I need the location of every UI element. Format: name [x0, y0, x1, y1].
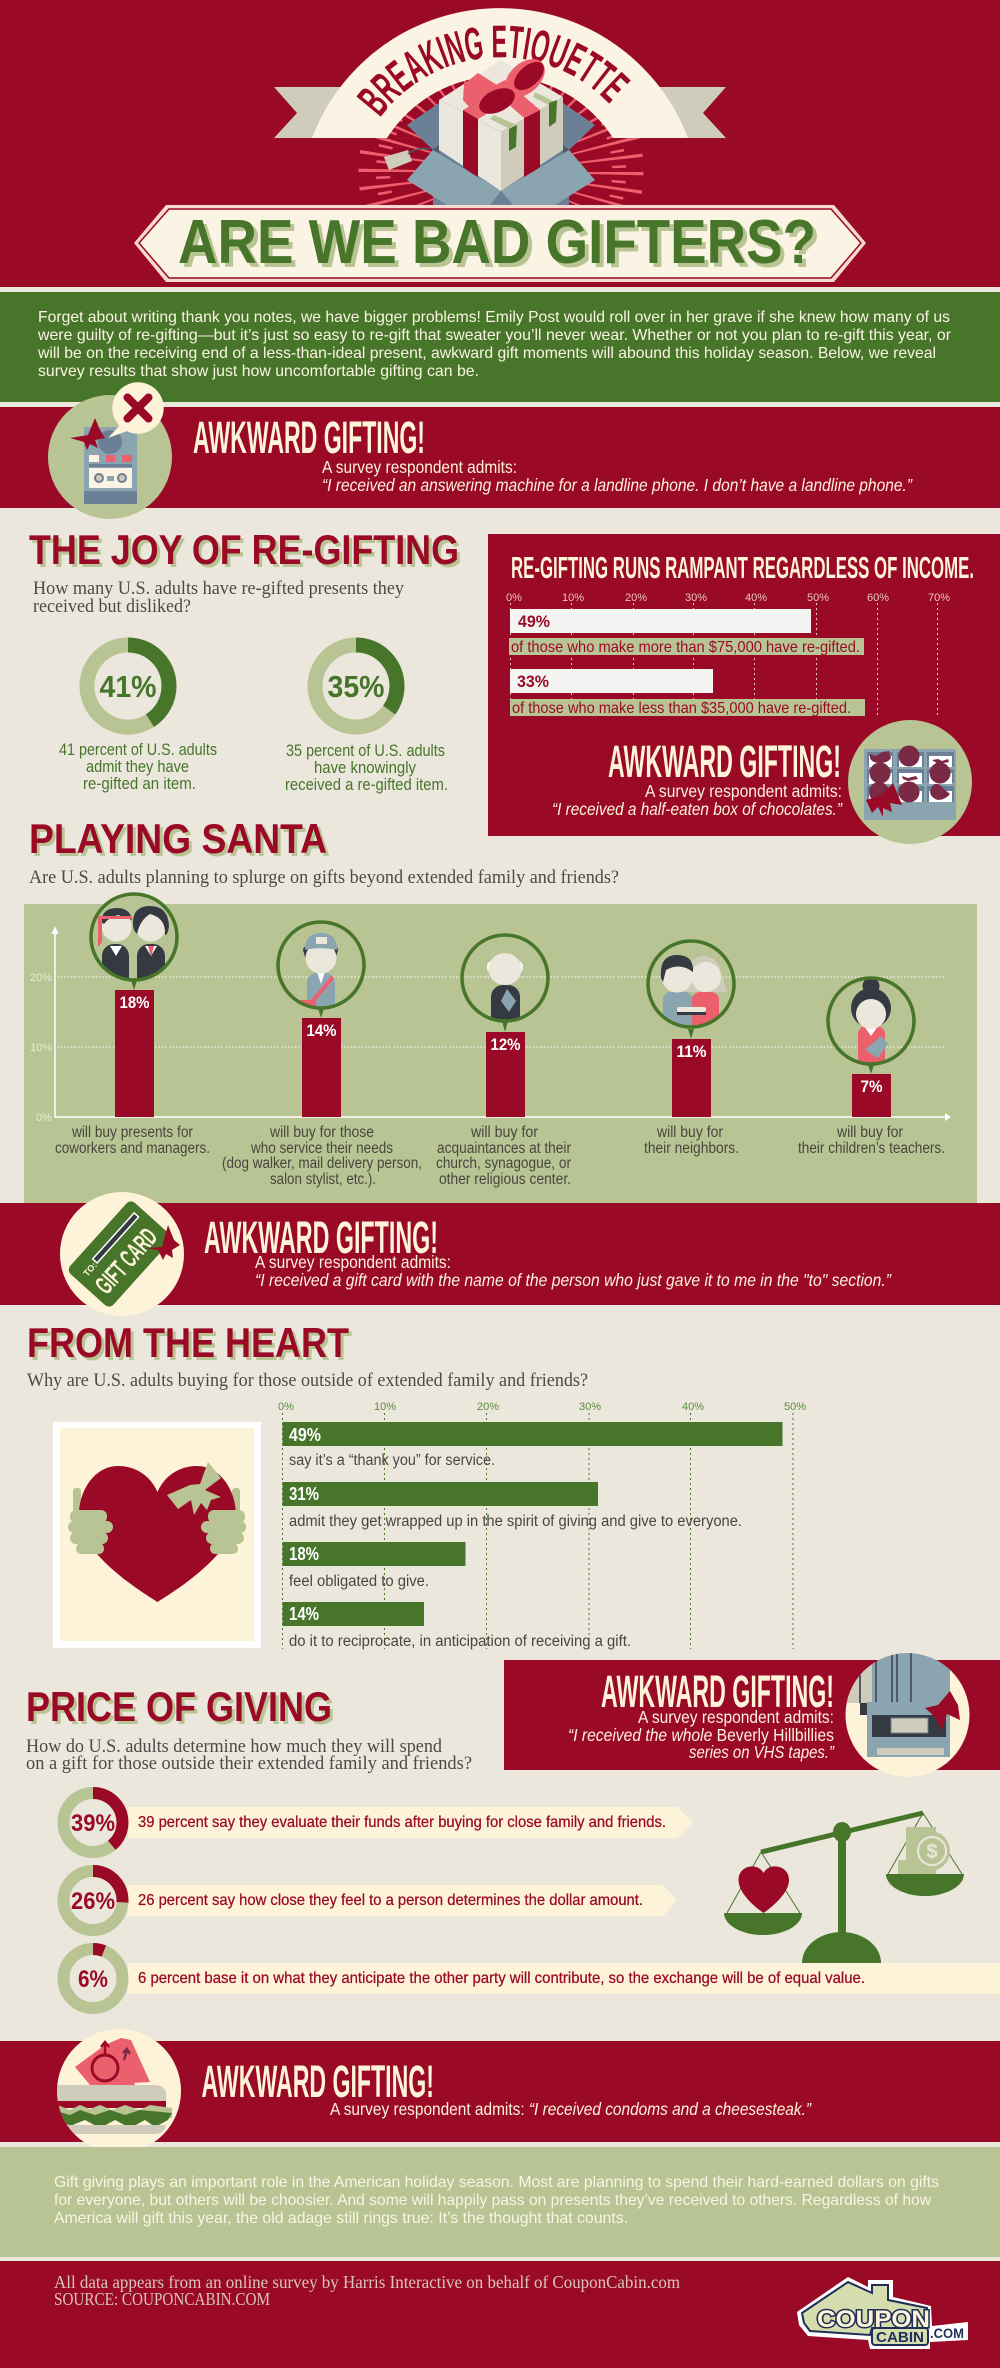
icon: condoms and cheesesteak	[50, 2029, 181, 2153]
section heading: price of giving: PRICE OF GIVING	[29, 1686, 335, 1733]
bar: coworkers 18 percent: 18%	[120, 993, 150, 1012]
icon: mail carrier	[278, 922, 364, 1023]
axis: 10%	[374, 1401, 396, 1413]
question: Are U.S. adults planning to splurge on gifts beyond extended family and friends?	[29, 867, 619, 888]
question	[26, 1736, 472, 1774]
row: 6 percent	[64, 1949, 1000, 2008]
arch with subtitle	[312, 8, 688, 138]
row: 26 percent: 26%	[71, 1888, 115, 1915]
caption: 35 percent: received a re-gifted item.	[285, 776, 448, 794]
source note: All data appears from an online survey by Harris Interactive on behalf of CouponCabin.com	[54, 2272, 680, 2292]
bar: 33 percent: 33%	[517, 672, 549, 691]
label: neighbors	[644, 1124, 739, 1157]
label: coworkers: will buy presents for	[71, 1124, 193, 1141]
donut: 41 percent: 41%	[100, 669, 156, 704]
panel: income	[488, 534, 1000, 844]
section heading: playing santa: PLAYING SANTA	[29, 815, 327, 862]
label: teachers: their children’s teachers.	[798, 1140, 945, 1157]
respondent quote	[255, 1252, 892, 1290]
section heading: from the heart: FROM THE HEART	[30, 1322, 352, 1369]
bar: 33 percent: of those who make less than $35,000 have re-gifted.	[512, 700, 851, 717]
bar: service workers 14 percent: 14%	[306, 1021, 336, 1040]
logo: CouponCabin: .COM	[930, 2325, 964, 2341]
heading: AWKWARD GIFTING!	[204, 1212, 438, 1263]
respondent quote	[552, 781, 843, 819]
caption: 41 percent: 41 percent of U.S. adults	[59, 741, 217, 759]
income axis: 50%	[807, 592, 829, 604]
respondent quote: “I received an answering machine for a landline phone. I don’t have a landline phone.”	[322, 475, 913, 495]
intro band: were guilty of re-gifting—but it’s just so easy to re-gift that sweater you’ll never wear. Whether or not you plan to re-gift this year, or	[37, 327, 952, 344]
question: on a gift for those outside their extended family and friends?	[26, 1753, 472, 1774]
icon: gift card: GIFT CARD	[89, 1222, 163, 1300]
chart axes: 20%	[30, 972, 52, 984]
respondent quote: A survey respondent admits:	[322, 457, 517, 477]
bar: teachers 7 percent	[852, 1074, 891, 1117]
icon: coworkers	[91, 894, 177, 994]
section heading: from the heart: FROM THE HEART	[27, 1319, 349, 1366]
bar: 14 percent: 14%	[289, 1604, 319, 1624]
icon: opened gift box	[384, 51, 595, 205]
income axis: 10%	[562, 592, 584, 604]
subtitle: breaking etiquette: BREAKING ETIQUETTE	[356, 26, 631, 117]
icon: clergy	[462, 935, 548, 1032]
row: 39 percent: 39%	[71, 1810, 115, 1837]
illustration: scale	[724, 1813, 964, 1963]
label: service workers: who service their needs	[250, 1140, 393, 1157]
income axis: 30%	[685, 592, 707, 604]
section heading: price of giving: PRICE OF GIVING	[26, 1683, 332, 1730]
label: neighbors: will buy for	[656, 1124, 723, 1141]
question	[33, 578, 404, 617]
logo: CouponCabin	[797, 2277, 968, 2349]
label: service workers: salon stylist, etc.).	[270, 1171, 376, 1188]
bar: 49 percent: say it’s a “thank you” for service.	[289, 1452, 495, 1469]
respondent quote: “I received the whole Beverly Hillbillies	[568, 1725, 834, 1745]
label: acquaintances	[436, 1124, 571, 1188]
bar: service workers 14 percent	[302, 1018, 341, 1117]
bar: 49 percent: 49%	[289, 1425, 321, 1445]
caption: 35 percent: 35 percent of U.S. adults	[286, 742, 445, 760]
section: the joy of re-gifting	[29, 526, 462, 794]
section: the joy of re-gifting: THE JOY OF RE-GIFTING	[32, 529, 462, 576]
donut: 41 percent	[87, 645, 169, 727]
bar: acquaintances 12 percent	[486, 1032, 525, 1117]
heading: AWKWARD GIFTING!	[202, 2056, 434, 2107]
icon: box of chocolates	[848, 720, 972, 844]
bar: 31 percent: admit they get wrapped up in the spirit of giving and give to everyone.	[289, 1513, 742, 1530]
axis	[278, 1401, 806, 1649]
awkward gifting panel: VHS	[504, 1650, 1000, 1777]
chart axes	[30, 926, 951, 1124]
icon: teacher	[828, 978, 914, 1074]
icon: VHS tapes	[846, 1650, 970, 1777]
awkward gifting band 3	[0, 2029, 1000, 2153]
label: acquaintances: other religious center.	[439, 1171, 571, 1188]
label: neighbors: their neighbors.	[644, 1140, 739, 1157]
axis: 0%	[278, 1401, 294, 1413]
icon: neighbors	[648, 941, 734, 1039]
respondent quote	[568, 1707, 835, 1762]
footer band	[0, 2261, 1000, 2368]
income axis: 0%	[506, 592, 522, 604]
question: How do U.S. adults determine how much they will spend	[26, 1736, 442, 1757]
bar: teachers 7 percent: 7%	[860, 1077, 882, 1096]
donut: 35 percent: 35%	[328, 669, 384, 704]
chart axes: 10%	[30, 1042, 52, 1054]
bar: 49 percent	[282, 1422, 782, 1469]
respondent quote: A survey respondent admits:	[645, 781, 842, 801]
bar: neighbors 11 percent	[672, 1039, 711, 1117]
row: 6 percent: 6%	[78, 1966, 108, 1993]
source note	[54, 2272, 680, 2309]
bar: 31 percent	[282, 1482, 742, 1530]
axis: 50%	[784, 1401, 806, 1413]
chart: reasons for buying	[278, 1401, 806, 1650]
bar: 33 percent	[510, 669, 865, 717]
conclusion band	[0, 2147, 1000, 2257]
bar: 31 percent: 31%	[289, 1484, 319, 1504]
respondent quote: A survey respondent admits: “I received condoms and a cheesesteak.”	[330, 2099, 812, 2119]
illustration: heart in frame	[53, 1422, 261, 1648]
bar: 18 percent	[282, 1542, 466, 1590]
label: coworkers: coworkers and managers.	[55, 1140, 210, 1157]
bar: 14 percent: do it to reciprocate, in anticipation of receiving a gift.	[289, 1633, 631, 1650]
intro band	[0, 292, 1000, 402]
label: acquaintances: church, synagogue, or	[436, 1155, 571, 1172]
bar: neighbors 11 percent: 11%	[676, 1042, 706, 1061]
label: coworkers	[55, 1124, 210, 1157]
chart axes: 0%	[36, 1112, 52, 1124]
caption: 41 percent	[59, 741, 217, 793]
label: service workers	[222, 1124, 422, 1188]
awkward gifting band 2	[0, 1192, 1000, 1316]
ribbon tails	[274, 87, 360, 138]
row: 39 percent	[64, 1793, 693, 1852]
label: acquaintances: will buy for	[470, 1124, 538, 1141]
row: 26 percent: 26 percent say how close they feel to a person determines the dollar amount.	[138, 1892, 643, 1909]
label: teachers	[798, 1124, 945, 1157]
bar: 49 percent: 49%	[518, 612, 550, 631]
axis: 20%	[477, 1401, 499, 1413]
label: service workers: (dog walker, mail delivery person,	[222, 1155, 422, 1172]
income axis: 70%	[928, 592, 950, 604]
intro band: will be on the receiving end of a less-than-ideal present, awkward gift moments will abound this holiday season. Below, we reveal	[37, 345, 936, 362]
icon: answering machine	[48, 382, 172, 519]
source note: SOURCE: COUPONCABIN.COM	[54, 2289, 270, 2309]
title: ARE WE BAD GIFTERS?	[178, 208, 816, 277]
caption: 35 percent: have knowingly	[314, 759, 417, 777]
respondent quote	[322, 457, 913, 495]
logo: CouponCabin: COUPON	[817, 2306, 930, 2333]
bar: 18 percent: 18%	[289, 1544, 319, 1564]
illustration: scale: $	[926, 1841, 938, 1863]
label: teachers: will buy for	[836, 1124, 903, 1141]
row: 39 percent: 39 percent say they evaluate their funds after buying for close family and friends.	[138, 1814, 666, 1831]
bar: 49 percent	[509, 609, 864, 656]
bar: 18 percent: feel obligated to give.	[289, 1573, 429, 1590]
icon: gift card	[60, 1192, 184, 1316]
panel: bar chart recipients	[24, 894, 977, 1204]
bar: acquaintances 12 percent: 12%	[490, 1035, 520, 1054]
bar: coworkers 18 percent	[115, 990, 154, 1117]
caption: 41 percent: re-gifted an item.	[83, 775, 196, 793]
respondent quote: series on VHS tapes.”	[689, 1742, 835, 1762]
sunburst rays	[358, 80, 644, 205]
label: service workers: will buy for those	[269, 1124, 374, 1141]
title banner: ARE WE BAD GIFTERS?	[182, 212, 820, 281]
bar: 49 percent: of those who make more than $75,000 have re-gifted.	[511, 639, 860, 656]
logo: CouponCabin: CABIN	[876, 2329, 924, 2346]
icon: gift card: TO:	[81, 1260, 99, 1278]
question: How many U.S. adults have re-gifted presents they	[33, 578, 404, 599]
respondent quote: “I received a gift card with the name of the person who just gave it to me in the "to" section.”	[255, 1270, 892, 1290]
bar: 14 percent	[282, 1602, 631, 1650]
income axis: 40%	[745, 592, 767, 604]
heading: AWKWARD GIFTING!	[193, 412, 425, 463]
axis: 30%	[579, 1401, 601, 1413]
intro band: Forget about writing thank you notes, we have bigger problems! Emily Post would roll over in her grave if she knew how many of us	[38, 309, 950, 326]
conclusion band: for everyone, but others will be choosier. And some will happily pass on presents they’ve received to others. Regardless of how	[54, 2192, 931, 2209]
question: Why are U.S. adults buying for those outside of extended family and friends?	[27, 1370, 588, 1391]
respondent quote: “I received a half-eaten box of chocolates.”	[552, 799, 843, 819]
intro band: survey results that show just how uncomfortable gifting can be.	[38, 363, 479, 380]
axis: 40%	[682, 1401, 704, 1413]
label: acquaintances: acquaintances at their	[437, 1140, 571, 1157]
respondent quote: A survey respondent admits:	[638, 1707, 834, 1727]
row: 26 percent	[64, 1871, 677, 1930]
income axis	[506, 592, 950, 715]
caption: 35 percent	[285, 742, 448, 794]
header band	[0, 0, 1000, 287]
heading: THE JOY OF RE-GIFTING	[29, 526, 459, 573]
conclusion band: Gift giving plays an important role in the American holiday season. Most are planning to spend their hard-earned dollars on gifts	[54, 2174, 939, 2191]
donut: 35 percent	[315, 645, 397, 727]
caption: 41 percent: admit they have	[86, 758, 189, 776]
income axis: 60%	[867, 592, 889, 604]
section heading: playing santa: PLAYING SANTA	[32, 818, 330, 865]
awkward gifting band 1	[0, 382, 1000, 519]
conclusion band: America will gift this year, the old adage still rings true: It’s the thought that counts.	[54, 2210, 628, 2227]
row: 6 percent: 6 percent base it on what they anticipate the other party will contribute, so the exchange will be of equal value.	[138, 1970, 865, 1987]
income axis: 20%	[625, 592, 647, 604]
question: received but disliked?	[33, 596, 191, 617]
respondent quote: A survey respondent admits:	[255, 1252, 451, 1272]
